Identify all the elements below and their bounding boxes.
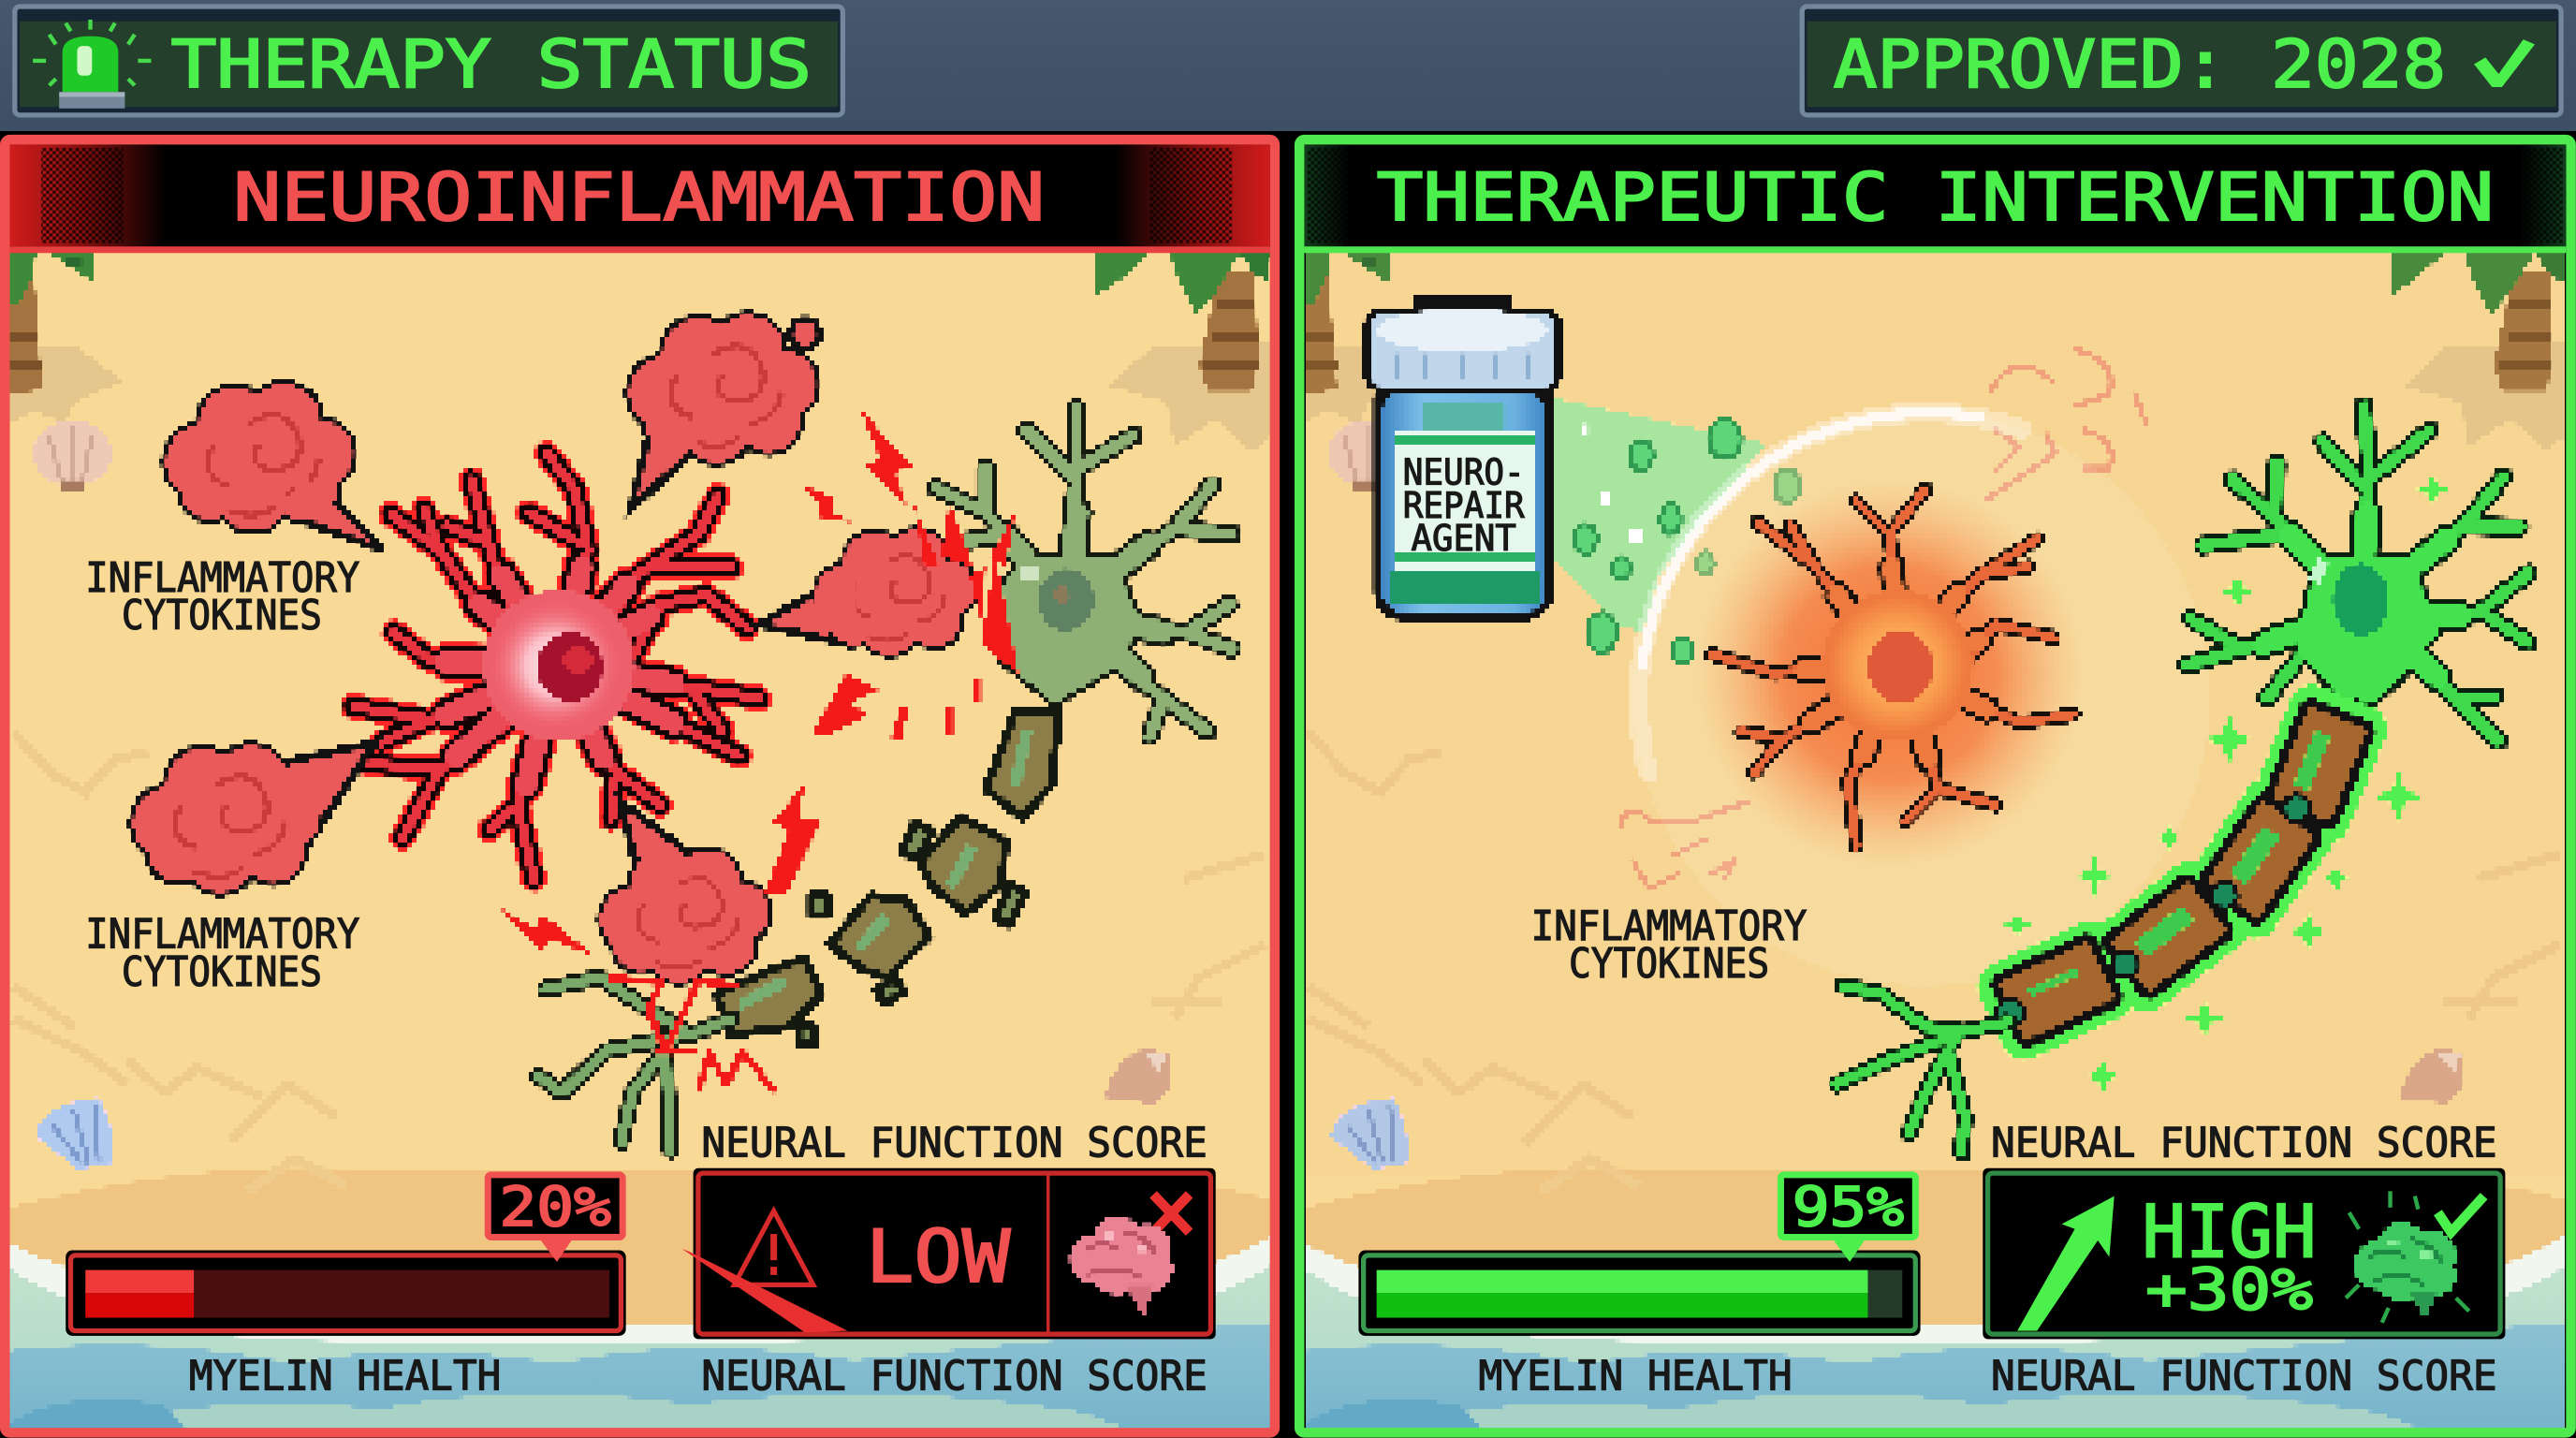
bottle: neuro-repair agent	[1364, 296, 1562, 621]
healthy axon with myelin	[1989, 697, 2375, 1048]
label: neural function score bottom right: NEURAL FUNCTION SCORE	[1991, 1353, 2497, 1401]
status panel: therapy status	[15, 7, 842, 115]
spray cone	[1552, 398, 1766, 633]
bubble interior	[1634, 411, 2209, 986]
cytokine cloud 2	[629, 315, 820, 509]
label: inflammatory cytokines 3	[1531, 902, 1807, 988]
label: inflammatory cytokines 2	[85, 911, 359, 996]
label: bottle text: NEURO-	[1403, 452, 1525, 494]
tag: 20%	[488, 1175, 622, 1262]
pixel brain icons	[1070, 1216, 2456, 1318]
tag: 95%: 95%	[1793, 1175, 1904, 1239]
label: inflammatory cytokines 1: INFLAMMATORY	[85, 554, 359, 602]
tag: 95%	[1780, 1175, 1915, 1262]
text: low: LOW	[866, 1215, 1011, 1299]
residual smoke outlines	[1619, 350, 2145, 888]
icon: green brain	[2354, 1223, 2456, 1318]
text: +30%: +30%	[2145, 1257, 2313, 1324]
label: myelin health left: MYELIN HEALTH	[189, 1353, 501, 1401]
droplets	[1573, 419, 1800, 664]
myelin bar: 95 percent	[1358, 1175, 1921, 1336]
label: neural function score top left: NEURAL FUNCTION SCORE	[701, 1120, 1208, 1167]
icon: warning triangle	[734, 1211, 813, 1284]
broken axon fragments	[716, 710, 1060, 1043]
cytokine cloud 4	[133, 742, 374, 892]
top status bar background	[0, 0, 2576, 131]
label: inflammatory cytokines 1: CYTOKINES	[122, 592, 322, 639]
panel frame: therapeutic intervention	[1299, 139, 2571, 1432]
sparkles	[2002, 473, 2450, 1093]
label: inflammatory cytokines 2: CYTOKINES	[122, 948, 322, 996]
restored neuron	[2187, 405, 2528, 741]
icon: check mark	[2474, 39, 2535, 87]
label: inflammatory cytokines 3: CYTOKINES	[1569, 940, 1769, 988]
damaged neuron: dendrites and body	[936, 407, 1232, 736]
icon: green siren	[33, 20, 151, 109]
icon: red x	[1153, 1195, 1190, 1232]
cytokine cloud 3	[759, 530, 975, 654]
text: approved date: APPROVED: 2028	[1834, 26, 2446, 103]
tag: 20%: 20%	[500, 1175, 611, 1239]
heading: therapy status: THERAPY STATUS	[171, 26, 812, 103]
label: inflammatory cytokines 3: INFLAMMATORY	[1531, 902, 1807, 950]
label: myelin health right: MYELIN HEALTH	[1478, 1353, 1793, 1401]
cytokine cloud 1	[166, 385, 385, 550]
text: high: HIGH	[2143, 1191, 2317, 1275]
label: inflammatory cytokines 1	[85, 554, 359, 639]
protective bubble	[1639, 413, 2021, 772]
heading: neuroinflammation: NEUROINFLAMMATION	[233, 159, 1045, 236]
label: bottle text	[1403, 452, 1525, 560]
cytokine cloud 5	[601, 801, 769, 982]
status panel: approved 2028	[1802, 7, 2561, 115]
activated microglia	[353, 453, 759, 879]
icon: pink brain	[1070, 1216, 1173, 1318]
healthy axon terminal	[1837, 986, 2008, 1153]
label: bottle text: AGENT	[1412, 518, 1516, 560]
icon: green up arrow	[2017, 1196, 2115, 1331]
panel art: neuroinflammation beach	[10, 253, 1271, 1438]
panel frame: neuroinflammation	[5, 139, 1275, 1432]
orange glow	[1695, 479, 2083, 868]
label: neural function score bottom left: NEURAL FUNCTION SCORE	[701, 1353, 1208, 1401]
red sparks	[500, 407, 1018, 956]
label: inflammatory cytokines 2: INFLAMMATORY	[85, 911, 359, 959]
score box: high +30%	[1983, 1168, 2505, 1339]
damaged axon terminal	[539, 977, 731, 1150]
panel art: therapeutic intervention beach	[1304, 253, 2566, 1438]
score box: low	[681, 1168, 1216, 1339]
myelin bar: 20 percent	[66, 1175, 626, 1336]
calming microglia	[1712, 490, 2073, 846]
icon: red slash	[681, 1249, 848, 1332]
label: bottle text: REPAIR	[1403, 485, 1525, 527]
label: neural function score top right: NEURAL FUNCTION SCORE	[1991, 1120, 2497, 1167]
heading: therapeutic intervention: THERAPEUTIC INTERVENTION	[1377, 159, 2494, 236]
icon: check and rays	[2346, 1191, 2484, 1323]
